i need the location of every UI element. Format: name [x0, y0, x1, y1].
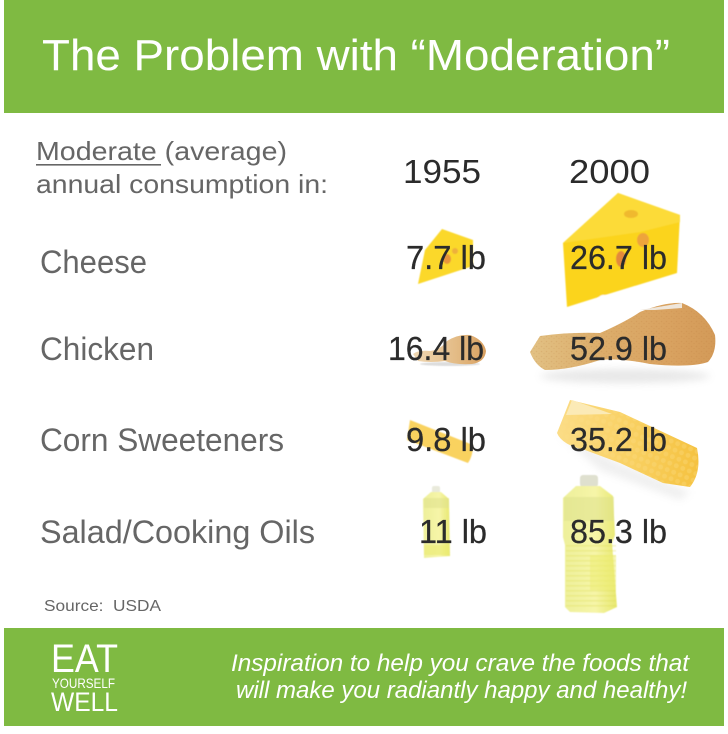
- title: The Problem with “Moderation”: [42, 31, 670, 80]
- tagline: Inspiration to help you crave the foods that: [231, 650, 690, 677]
- values: 1955: 7.7 lb: [406, 239, 486, 276]
- row labels: Corn Sweeteners: [40, 422, 284, 458]
- values: 2000: 52.9 lb: [570, 330, 667, 367]
- icon: large corn: [557, 400, 698, 500]
- icon: small chicken leg: [413, 335, 486, 366]
- icon: large oil bottle: [563, 475, 617, 613]
- icon: large cheese: [563, 193, 680, 307]
- row labels: Cheese: [40, 244, 147, 280]
- row labels: Chicken: [40, 331, 154, 367]
- values: 2000: 35.2 lb: [570, 421, 667, 458]
- values: 1955: 9.8 lb: [406, 421, 486, 458]
- values: 1955: 11 lb: [419, 513, 487, 550]
- logo: WELL: [51, 687, 118, 717]
- tagline: [231, 650, 690, 704]
- logo: YOURSELF: [52, 675, 115, 691]
- table intro text: [36, 136, 328, 199]
- column heading: 1955: 1955: [403, 153, 481, 190]
- values: 2000: 26.7 lb: [570, 239, 667, 276]
- icon: small cheese: [418, 229, 473, 284]
- icon: large chicken leg: [530, 303, 715, 383]
- table intro text: Moderate (average): [36, 136, 287, 166]
- values: 1955: 16.4 lb: [388, 330, 484, 367]
- source note: Source: USDA: [44, 598, 161, 615]
- values: 2000: 85.3 lb: [570, 513, 667, 550]
- row labels: Salad/Cooking Oils: [40, 514, 315, 550]
- table intro text: annual consumption in:: [36, 169, 328, 199]
- tagline: will make you radiantly happy and healthy!: [236, 677, 687, 704]
- icon: small corn: [407, 420, 473, 463]
- icon: small oil bottle: [423, 486, 450, 558]
- column heading: 2000: 2000: [569, 153, 650, 190]
- footer banner: [4, 628, 724, 726]
- values: 1955: [388, 239, 487, 550]
- row labels: [40, 244, 315, 550]
- logo: EAT: [51, 637, 118, 681]
- values: 2000: [570, 239, 667, 550]
- logo: [51, 637, 118, 717]
- title banner: [4, 0, 724, 113]
